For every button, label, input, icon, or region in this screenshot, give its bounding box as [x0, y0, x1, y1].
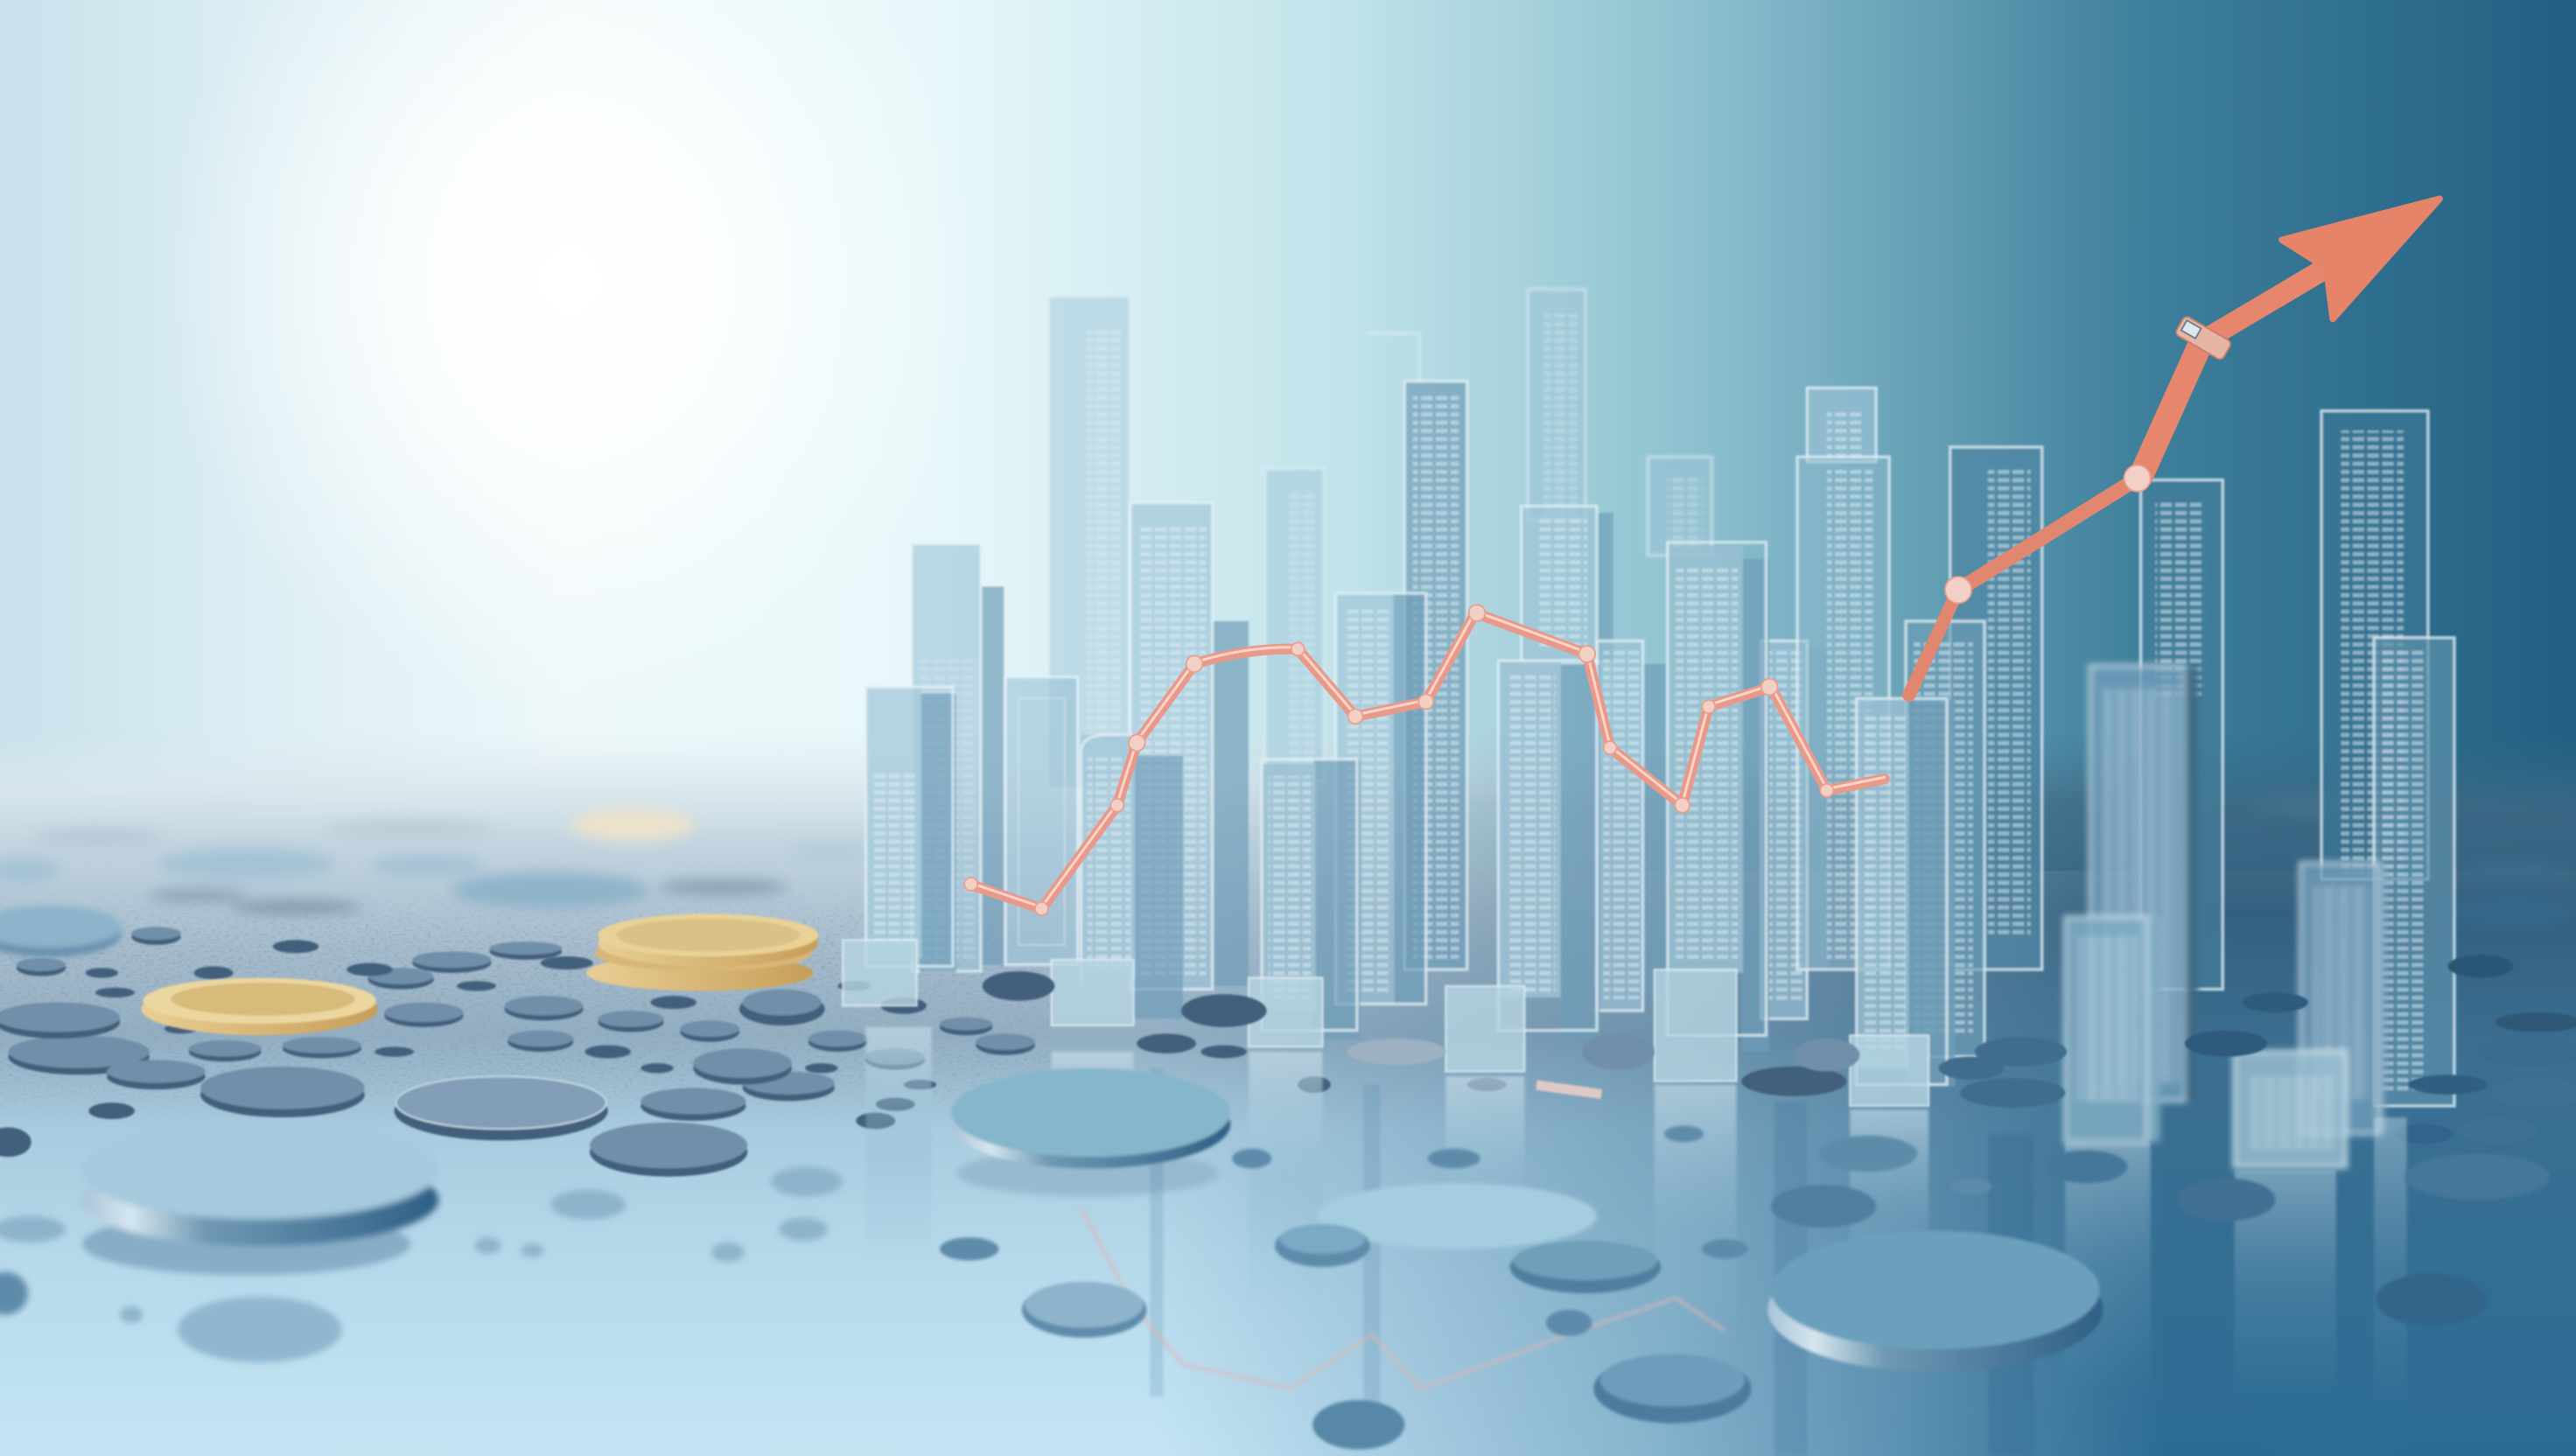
- distant blurred coins: [0, 792, 2576, 927]
- speckled droplets on table: [0, 905, 1050, 1097]
- line: rising segment three: [2140, 342, 2202, 477]
- front row of glass bars: [843, 542, 1955, 1106]
- bar: back top centre: [1528, 290, 1586, 519]
- bar: darker right tall: [1950, 447, 2042, 970]
- bar: right back tall: [2140, 480, 2222, 990]
- disc: centre reflection shadow: [956, 1151, 1219, 1196]
- gold coin, single: [141, 977, 378, 1035]
- arrow head: [2282, 199, 2440, 318]
- blurred foreground coins, left: [0, 1166, 843, 1362]
- growth line: [970, 268, 2327, 909]
- line: highlight: [970, 612, 1885, 907]
- floor discs, centre and right: [940, 1068, 2550, 1456]
- joints on the line: [964, 466, 2151, 915]
- bar: near right tall: [1906, 621, 1984, 1057]
- bar: right of centre: [1597, 640, 1666, 1011]
- bar: far right tallest: [2321, 411, 2428, 879]
- reflections of bars in table: [865, 1027, 2407, 1456]
- disc: bottom centre coins: [940, 1126, 2550, 1456]
- bar: back mid: [1265, 468, 1324, 780]
- bar: far right lower: [2374, 638, 2454, 1106]
- bar: centre-left tall: [1130, 503, 1249, 990]
- bar: tallest back left: [1048, 296, 1130, 788]
- bar: right mid narrow: [1761, 640, 1829, 1018]
- bar: centre mid: [1335, 593, 1426, 1004]
- bar: pale front tower: [2090, 666, 2198, 1101]
- disc: pale centre: [1318, 1183, 1597, 1249]
- gold coin stack: [586, 914, 818, 990]
- reflected line chart: [1081, 1208, 1725, 1389]
- small silver coin field, left: [0, 927, 1035, 1177]
- left blue coin on horizon: [0, 906, 122, 956]
- bar: front centre: [1249, 760, 1361, 1046]
- line: zigzag segment: [970, 613, 1885, 909]
- front right blurred glass bars: [2065, 666, 2385, 1166]
- line: arrow shaft: [2202, 268, 2327, 342]
- middle row of glass bars: [912, 382, 2454, 1106]
- bar: left tall: [912, 544, 1004, 971]
- bar: front centre-left: [1052, 735, 1183, 1026]
- disc: centre large: [951, 1068, 1230, 1168]
- bar: thin back outline: [1367, 333, 1419, 386]
- floor: reflective table surface: [0, 732, 2576, 1456]
- large silver coin: [395, 1076, 608, 1140]
- coins between bars: [983, 955, 2576, 1144]
- bar: right pair, upper: [1807, 388, 1876, 462]
- clamp joint on arrow: [2174, 315, 2232, 360]
- bar: base block far right: [2234, 1052, 2346, 1166]
- central blue discs on table: [956, 1151, 1219, 1196]
- bar: centre tall: [1404, 382, 1467, 970]
- bar: front right: [1850, 698, 1955, 1106]
- bar: hollow left: [1005, 677, 1078, 964]
- disc: right large: [1768, 1231, 2103, 1372]
- bar: front left: [843, 687, 956, 1005]
- back row of faint glass bars: [1048, 290, 1712, 788]
- bar: centre box top: [1522, 506, 1614, 664]
- bar: short far right: [2300, 863, 2385, 1134]
- large blurred blue coin, left foreground: [80, 1121, 438, 1275]
- line: rising segment: [1909, 590, 1958, 695]
- bar: front mid: [1446, 661, 1600, 1072]
- bar: right pair, lower: [1797, 457, 1889, 970]
- line: rising segment two: [1958, 477, 2140, 590]
- bar: back right of centre: [1648, 457, 1712, 556]
- bar: short front tower: [2065, 917, 2160, 1142]
- bar: front tall right of centre: [1655, 542, 1769, 1082]
